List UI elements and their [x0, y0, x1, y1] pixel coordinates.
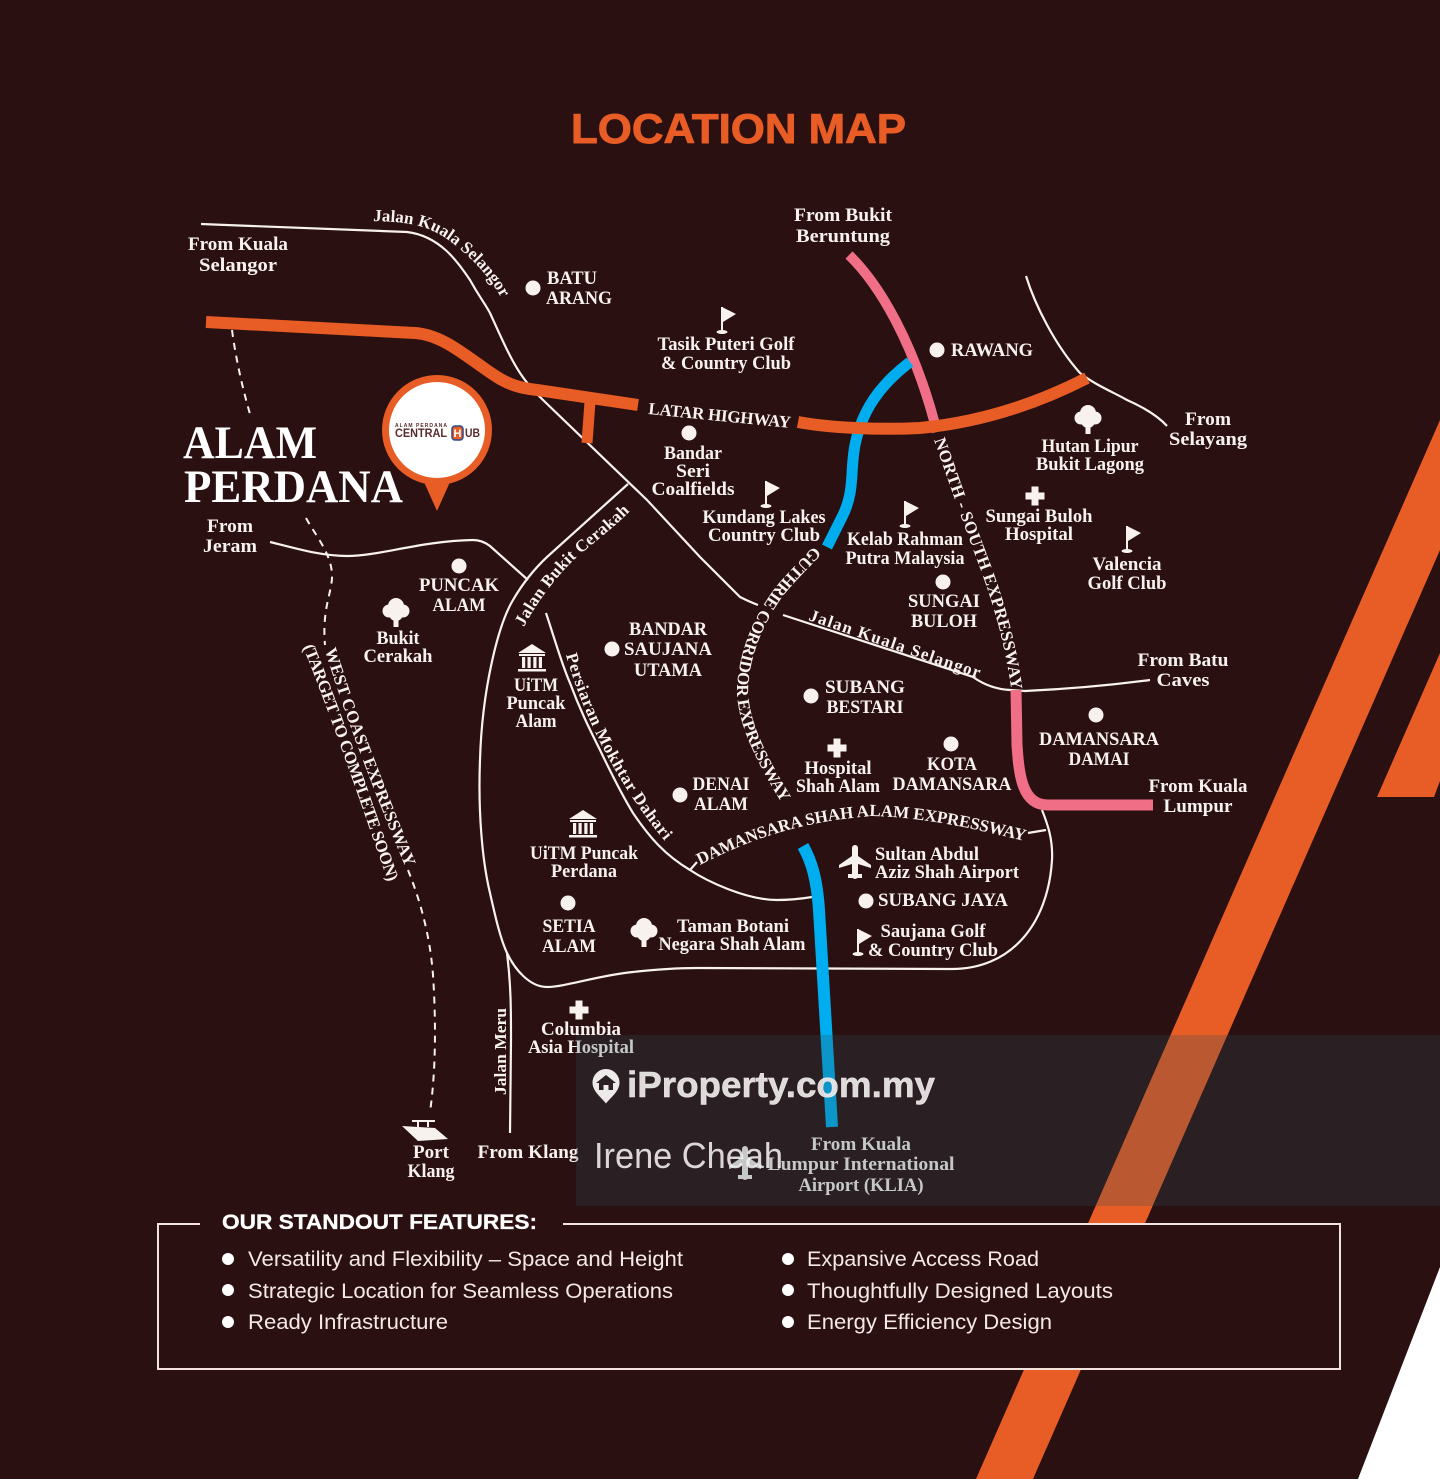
golf: Kundang Lakes Country Club — [702, 481, 826, 546]
hospital: Hospital Shah Alam: Shah Alam — [796, 777, 881, 797]
port: Port Klang: Port — [413, 1143, 450, 1163]
road name labels on curves: Jalan Kuala Selangor — [374, 210, 508, 296]
origin label: From Jeram — [203, 517, 258, 557]
heading: Alam Perdana — [183, 417, 403, 513]
road network: thin white roads — [201, 224, 1167, 1133]
title: LOCATION MAP — [571, 105, 906, 152]
hospital: Sungai Buloh Hospital: Sungai Buloh — [986, 507, 1093, 527]
origin label: From Kuala Selangor — [188, 235, 288, 276]
golf: Valencia Golf Club — [1088, 526, 1166, 594]
decorative orange corner shape — [1377, 653, 1440, 797]
hospital: Hospital Shah Alam — [796, 738, 881, 797]
origin label: From Kuala Selangor: From Kuala — [188, 235, 288, 255]
features list: left column: Ready Infrastructure — [248, 1311, 448, 1334]
golf: Valencia Golf Club: Golf Club — [1088, 574, 1166, 594]
place: Sungai Buloh — [908, 574, 980, 632]
origin label: From Bukit Beruntung: Beruntung — [796, 227, 891, 247]
place: Setia Alam: SETIA — [542, 917, 596, 937]
features heading: OUR STANDOUT FEATURES: — [222, 1211, 537, 1234]
place: Denai Alam: DENAI — [692, 775, 750, 795]
hospital: Hospital Shah Alam: Hospital — [804, 759, 872, 779]
golf: Kundang Lakes Country Club: Kundang Lakes — [702, 508, 826, 528]
park: Hutan Lipur Bukit Lagong: Hutan Lipur — [1042, 437, 1138, 457]
road name labels on curves: NORTH - SOUTH EXPRESSWAY — [934, 436, 1022, 688]
university: UiTM Puncak Alam — [506, 644, 566, 732]
origin label: From Bukit Beruntung: From Bukit — [794, 206, 893, 226]
golf: Tasik Puteri Golf and Country Club — [658, 307, 795, 374]
place: Bandar Saujana Utama: UTAMA — [634, 661, 703, 681]
park: Bukit Cerakah: Cerakah — [364, 647, 433, 667]
place: Subang Bestari: BESTARI — [826, 698, 904, 718]
location pin: Central Hub: UB — [465, 426, 480, 440]
North-South Expressway pink route — [849, 255, 1153, 805]
university: UiTM Puncak Alam: Puncak — [506, 694, 566, 714]
road name labels on curves — [302, 210, 1027, 1132]
origin label: From Klang: From Klang — [478, 1143, 579, 1163]
park: Bukit Cerakah: Bukit — [376, 629, 420, 649]
golf: Valencia Golf Club: Valencia — [1092, 555, 1162, 575]
features list: left column: Versatility and Flexibility – Space and Height — [248, 1248, 683, 1271]
place: Batu Arang: ARANG — [546, 289, 612, 309]
golf: Tasik Puteri Golf and Country Club: Tasik Puteri Golf — [658, 335, 795, 355]
place: Batu Arang — [526, 269, 612, 309]
golf: Saujana Golf and Country Club: & Country Club — [868, 941, 998, 961]
airport: From Kuala Lumpur International Airport — [729, 1135, 954, 1196]
heading: Alam Perdana: ALAM — [183, 417, 317, 469]
origin label: From Selayang — [1169, 410, 1248, 450]
place: Kota Damansara: DAMANSARA — [892, 775, 1012, 795]
hospital: Columbia Asia Hospital: Asia Hospital — [528, 1038, 634, 1058]
place: Bandar Saujana Utama — [604, 620, 713, 681]
West Coast Expressway dashed route — [232, 330, 435, 1112]
place: Damansara Damai: DAMANSARA — [1039, 730, 1160, 750]
golf: Kundang Lakes Country Club: Country Club — [708, 526, 820, 546]
origin label: From Jeram: Jeram — [203, 537, 258, 557]
origin label: From Batu Caves: From Batu — [1138, 651, 1228, 671]
road name labels on curves: Persiaran Mokhtar Dahari — [566, 652, 673, 841]
place: Bandar Seri Coalfields: Coalfields — [652, 480, 734, 500]
origin label: From Batu Caves — [1138, 651, 1228, 691]
features list: left column: Strategic Location for Seamless Operations — [248, 1280, 673, 1303]
golf: Tasik Puteri Golf and Country Club: & Country Club — [661, 354, 791, 374]
features list: right column: Expansive Access Road — [807, 1248, 1039, 1271]
location pin: Central Hub: CENTRAL — [395, 426, 447, 440]
place: Subang Jaya: SUBANG JAYA — [878, 891, 1009, 911]
origin label: From Jeram: From — [207, 517, 254, 537]
place: Damansara Damai: DAMAI — [1068, 750, 1130, 770]
golf: Kelab Rahman Putra Malaysia — [846, 501, 964, 569]
origin label: From Kuala Lumpur — [1148, 777, 1248, 817]
road name labels on curves: (TARGET TO COMPLETE SOON) — [302, 645, 398, 881]
road name labels on curves: Jalan Kuala Selangor — [808, 610, 981, 678]
place: Kota Damansara: KOTA — [927, 755, 978, 775]
road name labels on curves: GUTHRIE CORRIDOR EXPRESSWAY — [737, 548, 820, 800]
hospital: Sungai Buloh Hospital: Hospital — [1005, 525, 1073, 545]
watermark: iProperty pin icon — [592, 1069, 620, 1104]
university: UiTM Puncak Alam: UiTM — [514, 676, 558, 696]
airport: Sultan Abdul Aziz Shah Airport: Sultan Abdul — [875, 845, 979, 865]
panel: standout features — [158, 1211, 1340, 1369]
road name labels on curves: Jalan Bukit Cerakah — [515, 506, 630, 626]
golf: Kelab Rahman Putra Malaysia: Kelab Rahman — [847, 530, 964, 550]
road name labels on curves: LATAR HIGHWAY — [648, 403, 792, 428]
place: Damansara Damai — [1039, 708, 1160, 770]
port: Port Klang — [402, 1120, 455, 1182]
place: Setia Alam: ALAM — [542, 937, 596, 957]
features list: left column — [222, 1248, 683, 1334]
features list: right column: Thoughtfully Designed Layouts — [807, 1280, 1113, 1303]
location pin: Central Hub: H — [454, 428, 462, 440]
university: UiTM Puncak Perdana: UiTM Puncak — [530, 844, 639, 864]
park: Hutan Lipur Bukit Lagong: Bukit Lagong — [1036, 455, 1145, 475]
origin label: From Kuala Selangor: Selangor — [199, 256, 277, 276]
features list: right column — [782, 1248, 1113, 1334]
place: Puncak Alam — [419, 558, 500, 616]
park: Taman Botani Negara Shah Alam: Taman Botani — [677, 917, 789, 937]
origin label: From Kuala Lumpur: From Kuala — [1148, 777, 1248, 797]
park: Taman Botani Negara Shah Alam: Negara Shah Alam — [658, 935, 806, 955]
port: Port Klang: Klang — [408, 1162, 455, 1182]
place: Sungai Buloh: SUNGAI — [908, 592, 980, 612]
Guthrie Corridor blue route — [827, 362, 910, 547]
place: Puncak Alam: PUNCAK — [419, 576, 500, 596]
place: Bandar Seri Coalfields: Bandar — [664, 444, 722, 464]
origin label: From Batu Caves: Caves — [1156, 671, 1210, 691]
airport: From Kuala Lumpur International Airport: Lumpur International — [768, 1155, 954, 1175]
airport: Sultan Abdul Aziz Shah Airport — [839, 845, 1020, 883]
university: UiTM Puncak Alam: Alam — [516, 712, 557, 732]
origin label: From Kuala Lumpur: Lumpur — [1164, 797, 1232, 817]
university: UiTM Puncak Perdana — [530, 810, 639, 882]
hospital: Columbia Asia Hospital: Columbia — [541, 1020, 621, 1040]
place: Bandar Seri Coalfields — [652, 426, 734, 500]
place: Sungai Buloh: BULOH — [911, 612, 978, 632]
park: Bukit Cerakah — [364, 598, 433, 667]
park: Hutan Lipur Bukit Lagong — [1036, 405, 1145, 475]
location pin: Central Hub: ALAM PERDANA — [395, 423, 447, 429]
hospital: Columbia Asia Hospital — [528, 1000, 634, 1058]
place: Denai Alam: ALAM — [694, 795, 748, 815]
decorative orange diagonal band — [976, 420, 1440, 1479]
golf: Saujana Golf and Country Club — [852, 922, 998, 961]
place: Subang Bestari: SUBANG — [825, 678, 905, 698]
watermark: iProperty wordmark: iProperty.com.my — [627, 1064, 935, 1105]
road name labels on curves: WEST COAST EXPRESSWAY — [326, 646, 416, 865]
road name labels on curves: DAMANSARA SHAH ALAM EXPRESSWAY — [695, 804, 1027, 865]
airport: Sultan Abdul Aziz Shah Airport: Aziz Shah Airport — [875, 863, 1020, 883]
place: Kota Damansara — [892, 736, 1012, 795]
airport: From Kuala Lumpur International Airport: From Kuala — [811, 1135, 911, 1155]
place: Denai Alam — [672, 775, 750, 815]
watermark: agent name: Irene Cheah — [594, 1135, 783, 1176]
watermark panel — [576, 1035, 1440, 1206]
university: UiTM Puncak Perdana: Perdana — [551, 862, 617, 882]
place: Bandar Seri Coalfields: Seri — [676, 462, 710, 482]
location pin: Central Hub — [386, 378, 488, 511]
place: Bandar Saujana Utama: BANDAR — [629, 620, 708, 640]
place: Bandar Saujana Utama: SAUJANA — [624, 640, 713, 660]
park: Taman Botani Negara Shah Alam — [630, 917, 806, 955]
origin label: From Selayang: Selayang — [1169, 430, 1248, 450]
Latar Highway orange route — [206, 322, 1087, 443]
features list: right column: Energy Efficiency Design — [807, 1311, 1052, 1334]
hospital: Sungai Buloh Hospital — [986, 486, 1093, 545]
place: Puncak Alam: ALAM — [432, 596, 486, 616]
origin label: From Bukit Beruntung — [794, 206, 893, 247]
place: Batu Arang: BATU — [547, 269, 597, 289]
heading: Alam Perdana: PERDANA — [184, 461, 403, 513]
golf: Kelab Rahman Putra Malaysia: Putra Malaysia — [846, 549, 964, 569]
golf: Saujana Golf and Country Club: Saujana Golf — [880, 922, 986, 942]
airport: From Kuala Lumpur International Airport: Airport (KLIA) — [798, 1176, 924, 1196]
place: Setia Alam — [542, 896, 596, 957]
place: Rawang: RAWANG — [951, 341, 1033, 361]
Damansara to KLIA blue route — [803, 846, 832, 1127]
place: Subang Bestari — [804, 678, 905, 718]
decorative white corner — [1358, 1267, 1440, 1479]
origin label: From Selayang: From — [1185, 410, 1232, 430]
road name labels on curves: Jalan Meru — [491, 1008, 510, 1095]
